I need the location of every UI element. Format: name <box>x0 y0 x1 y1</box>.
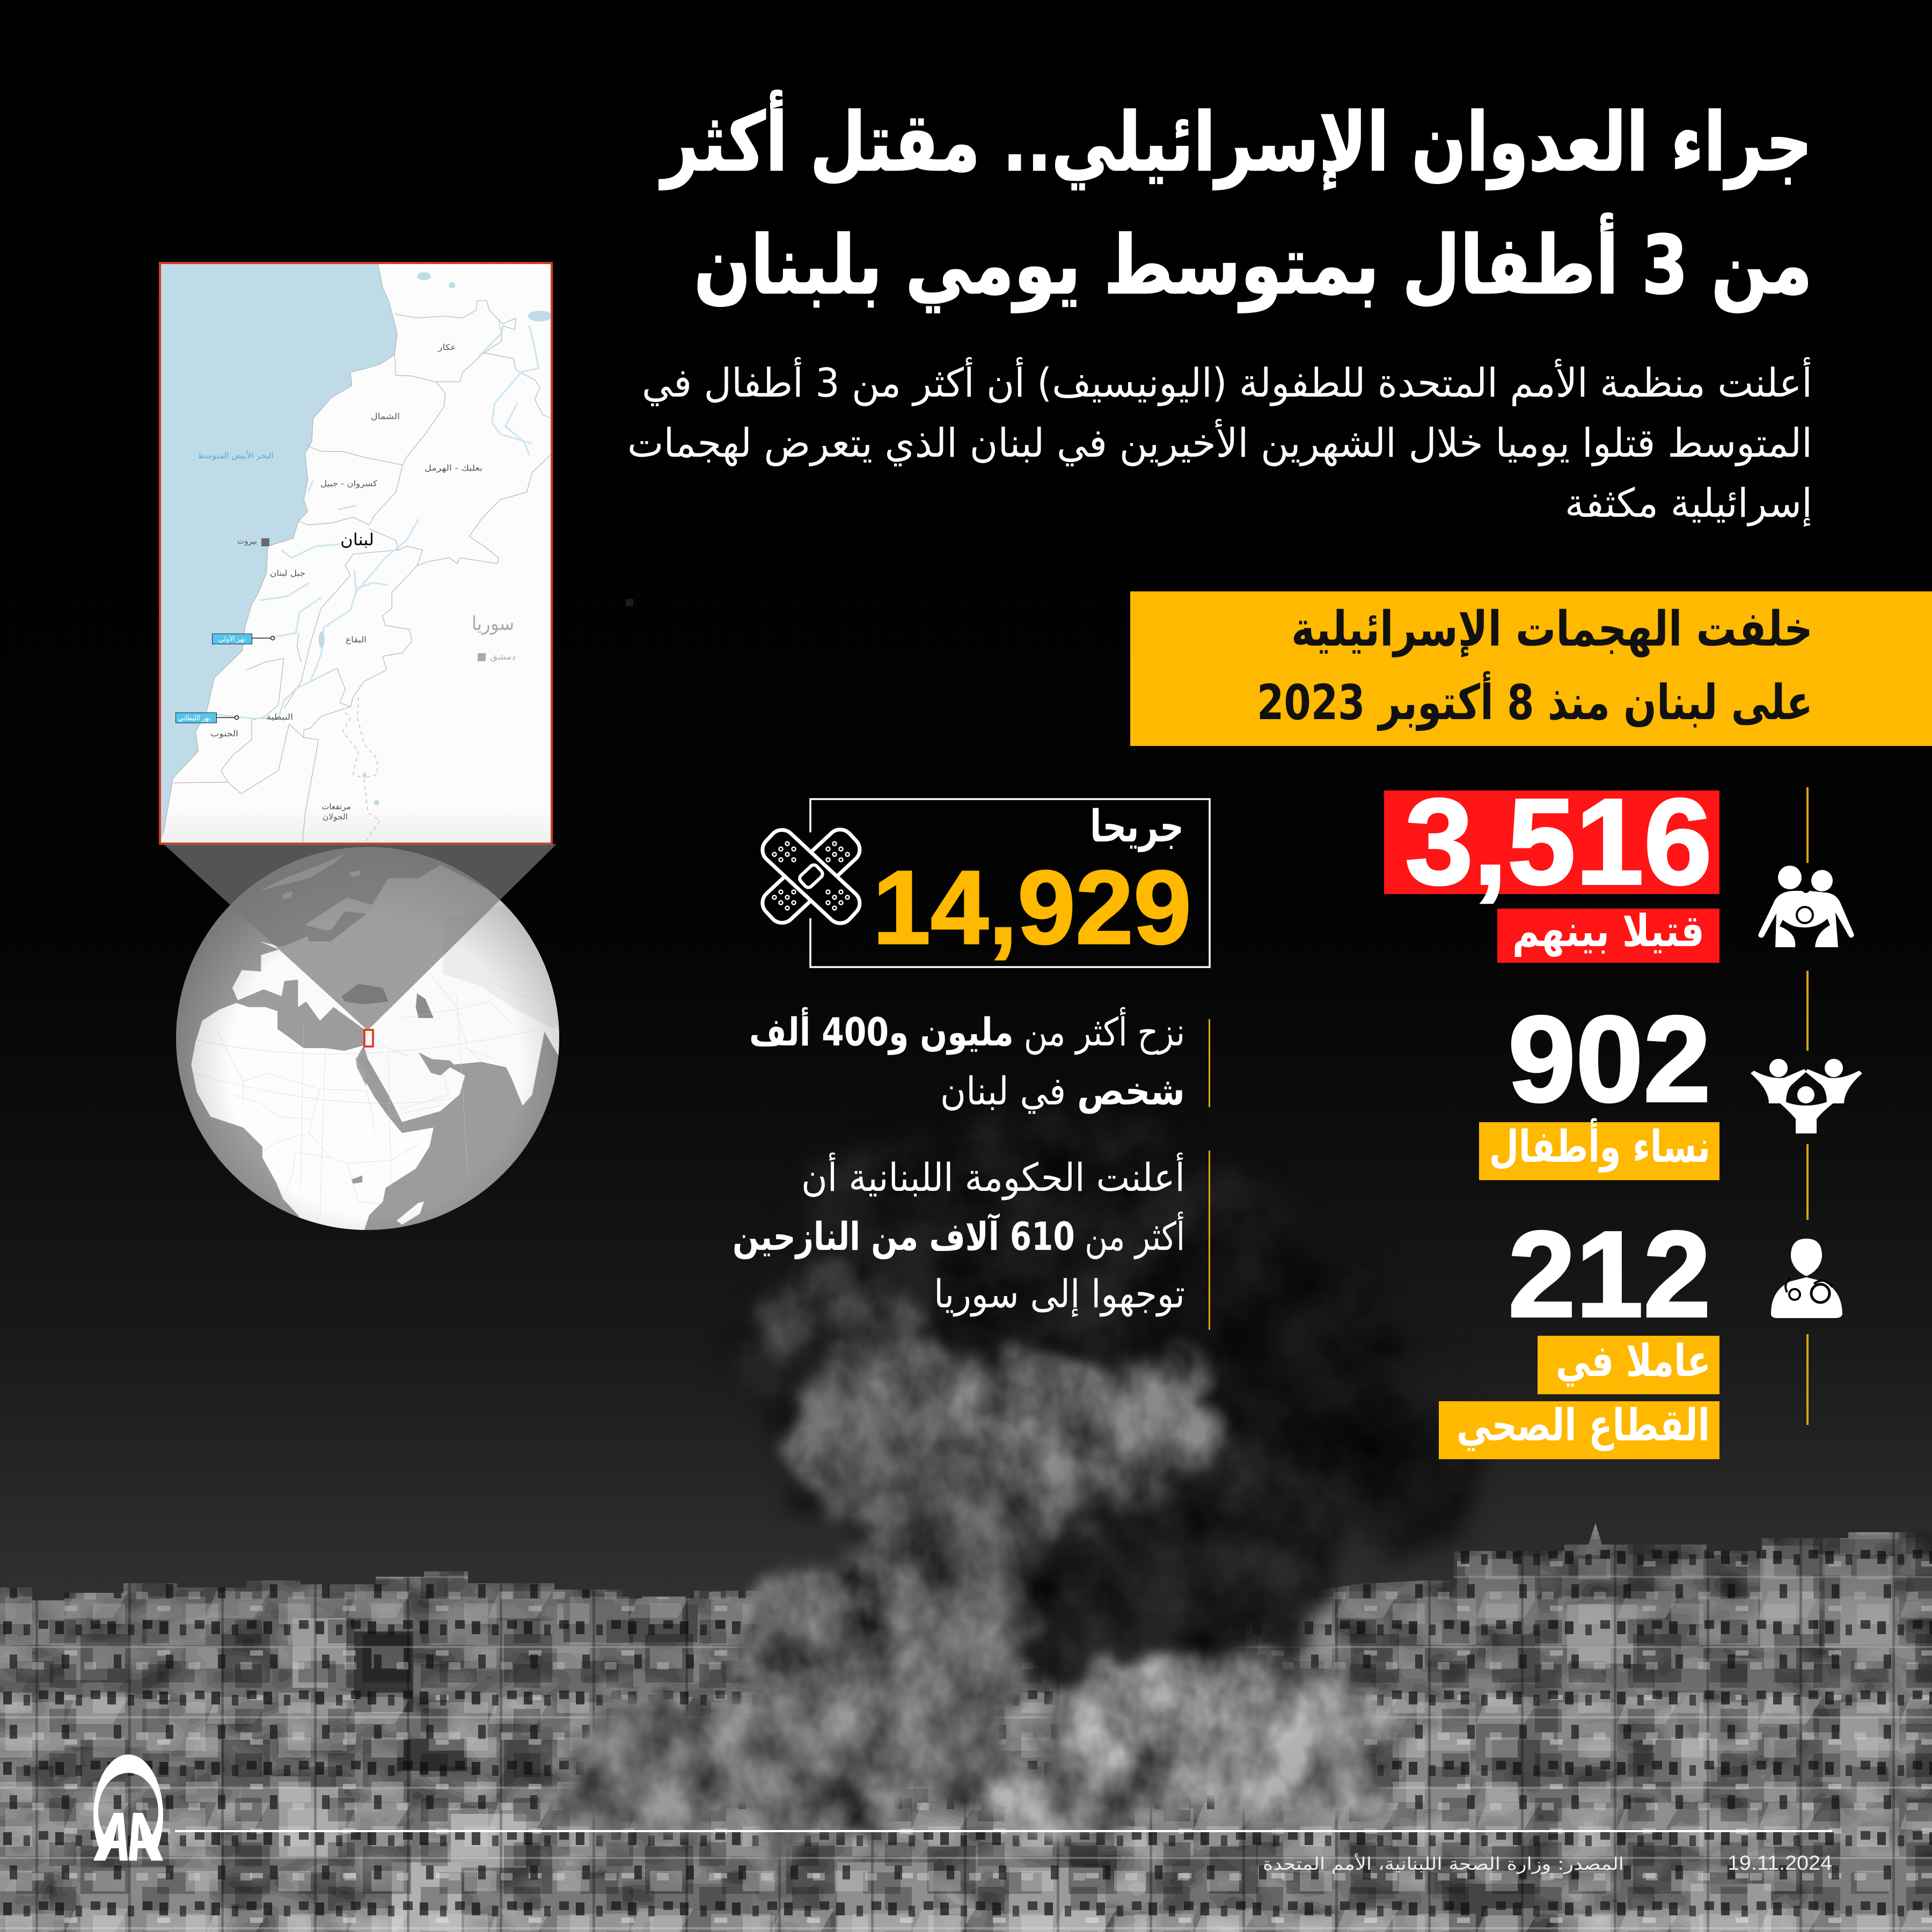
map labels: عكار <box>437 342 456 352</box>
wounded box: جريحا <box>1090 801 1184 852</box>
map of Lebanon <box>159 262 552 844</box>
map fade <box>159 805 552 844</box>
globe ocean <box>176 847 559 1230</box>
small mark <box>626 599 633 606</box>
title: من 3 أطفال بمتوسط يومي بلبنان <box>694 213 1812 313</box>
map labels: الجنوب <box>210 729 238 738</box>
stat: 212: 212 <box>1508 1206 1711 1343</box>
yellow header banner <box>1130 591 1932 746</box>
yellow header banner: خلفت الهجمات الإسرائيلية <box>1291 601 1813 658</box>
river label: Litani <box>176 713 238 723</box>
stat: killed 3,516: 3,516 <box>1405 774 1712 910</box>
map labels: النبطية <box>266 712 293 722</box>
globe land <box>191 854 564 1232</box>
map labels: البقاع <box>346 635 367 645</box>
Syria returnees text block: أعلنت الحكومة اللبنانية أن <box>801 1152 1185 1201</box>
wounded box <box>810 799 1210 967</box>
displaced text block: شخص في لبنان <box>940 1069 1185 1114</box>
city markers <box>261 538 486 661</box>
intro paragraph: أعلنت منظمة الأمم المتحدة للطفولة (اليونيسيف) أن أكثر من 3 أطفال في <box>642 357 1812 406</box>
map labels: لبنان <box>340 530 374 550</box>
intro paragraph: إسرائيلية مكثفة <box>1565 480 1812 526</box>
stat: 902: نساء وأطفال <box>1489 1118 1710 1173</box>
map labels: الشمال <box>371 412 400 421</box>
map land background <box>159 262 552 844</box>
map geography <box>159 262 552 844</box>
river label: Litani: نهر الليطاني <box>178 714 210 722</box>
title <box>658 90 1812 313</box>
stat: 902 <box>1479 991 1719 1180</box>
map labels: دمشق <box>490 652 516 662</box>
logo: AA <box>93 1754 163 1861</box>
stat: 212 <box>1439 1206 1719 1459</box>
timeline segments <box>1806 787 1809 1425</box>
map labels: سوريا <box>472 613 514 635</box>
river label: Awali <box>213 634 275 644</box>
river label: Awali: نهر الأولي <box>218 634 245 643</box>
displaced text block <box>749 1007 1210 1114</box>
displaced text block: نزح أكثر من مليون و400 ألف <box>749 1007 1185 1055</box>
zoom cone <box>164 844 557 1030</box>
intro paragraph: المتوسط قتلوا يوميا خلال الشهرين الأخيرين في لبنان الذي يتعرض لهجمات <box>627 419 1812 466</box>
icon: family <box>1758 866 1854 947</box>
Syria returnees text block: توجهوا إلى سوريا <box>934 1271 1185 1317</box>
date: 19.11.2024 <box>1728 1852 1832 1875</box>
photo: city skyline <box>0 1519 1932 1932</box>
icon: crossed bandages <box>757 824 865 928</box>
icon: women and children <box>1751 1059 1862 1133</box>
stat: 212: عاملا في <box>1556 1336 1711 1387</box>
photo: smoke cloud <box>553 1132 1508 1841</box>
wounded box: 14,929 <box>873 849 1191 966</box>
Syria returnees text block: أكثر من 610 آلاف من النازحين <box>733 1211 1185 1260</box>
map labels: البحر الأبيض المتوسط <box>197 450 274 460</box>
footer rule <box>175 1830 1832 1832</box>
map labels: مرتفعات <box>321 802 351 811</box>
stat: killed 3,516: قتيلا بينهم <box>1512 906 1704 957</box>
source text: المصدر: وزارة الصحة اللبنانية، الأمم المتحدة <box>1263 1853 1624 1874</box>
map labels: بيروت <box>237 536 257 546</box>
map labels: جبل لبنان <box>270 568 305 578</box>
stat: 212: القطاع الصحي <box>1457 1400 1710 1451</box>
Syria returnees text block <box>733 1151 1210 1330</box>
map labels: كسروان - جبيل <box>320 479 378 488</box>
yellow header banner: على لبنان منذ 8 أكتوبر 2023 <box>1257 671 1813 731</box>
globe <box>164 844 564 1232</box>
map frame <box>160 263 552 844</box>
map labels <box>197 342 516 822</box>
map labels: الجولان <box>323 812 348 822</box>
stat: 902: 902 <box>1508 991 1711 1128</box>
globe shading <box>176 847 559 1230</box>
box frame <box>810 799 1210 967</box>
intro paragraph <box>627 357 1812 526</box>
Lebanon locator <box>364 1030 373 1046</box>
icon: health worker <box>1771 1239 1842 1318</box>
stat: killed 3,516 <box>1384 774 1719 963</box>
map labels: بعلبك - الهرمل <box>425 463 482 473</box>
